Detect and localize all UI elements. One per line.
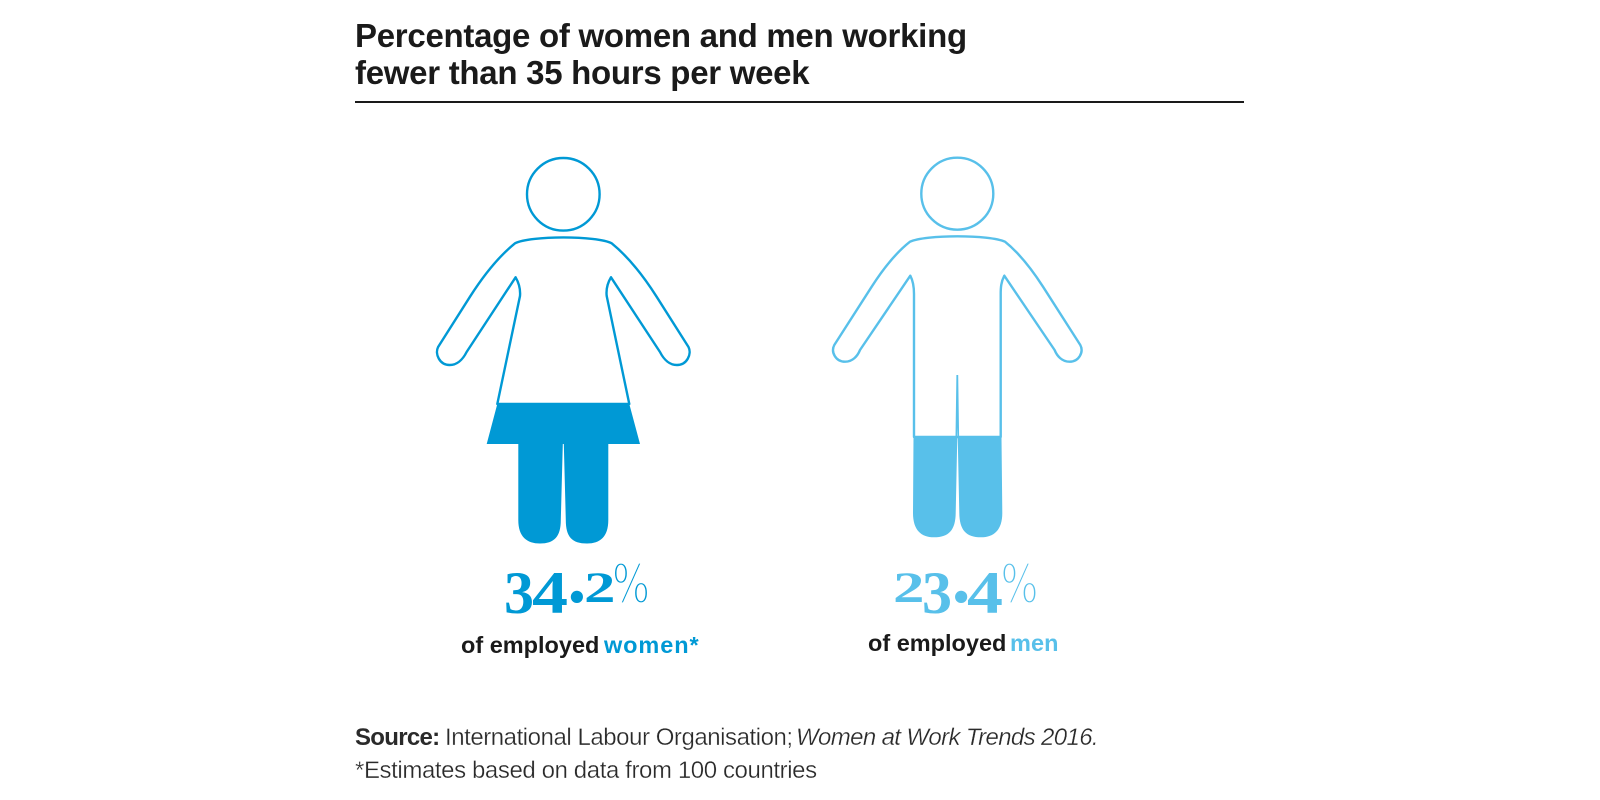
title: fewer than 35 hours per week bbox=[355, 54, 810, 91]
value: 34.2%: 4 bbox=[532, 560, 568, 627]
value: 34.2%: 3 bbox=[504, 560, 534, 626]
title bbox=[355, 17, 967, 91]
panel: women bbox=[437, 158, 700, 658]
value: 23.4%: . bbox=[952, 536, 971, 619]
value: 34.2%: 2 bbox=[584, 563, 615, 612]
icon: man figure, partly filled bbox=[833, 158, 1082, 537]
value: 23.4%: % bbox=[1000, 554, 1038, 616]
value: 23.4%: 4 bbox=[967, 560, 1003, 627]
icon: woman figure, partly filled bbox=[437, 158, 690, 544]
source note: International Labour Organisation; bbox=[445, 724, 793, 751]
value: 23.4%: 3 bbox=[922, 560, 952, 626]
value: 23.4% bbox=[893, 536, 1038, 627]
value: 34.2%: % bbox=[612, 554, 650, 616]
label: of employed women: of employed bbox=[461, 632, 599, 658]
label: of employed women: women* bbox=[603, 632, 700, 658]
source note: *Estimates based on data from 100 countries bbox=[355, 757, 817, 784]
value: 34.2% bbox=[504, 536, 650, 627]
value: 34.2%: . bbox=[568, 536, 586, 619]
label: of employed men: of employed bbox=[868, 630, 1006, 656]
source note: Women at Work Trends 2016. bbox=[796, 724, 1098, 751]
value: 23.4%: 2 bbox=[893, 563, 924, 612]
panel: men bbox=[833, 158, 1082, 656]
source note bbox=[355, 724, 1098, 784]
source note: Source: bbox=[355, 724, 439, 751]
label: of employed men: men bbox=[1010, 630, 1059, 656]
title: Percentage of women and men working bbox=[355, 17, 967, 54]
